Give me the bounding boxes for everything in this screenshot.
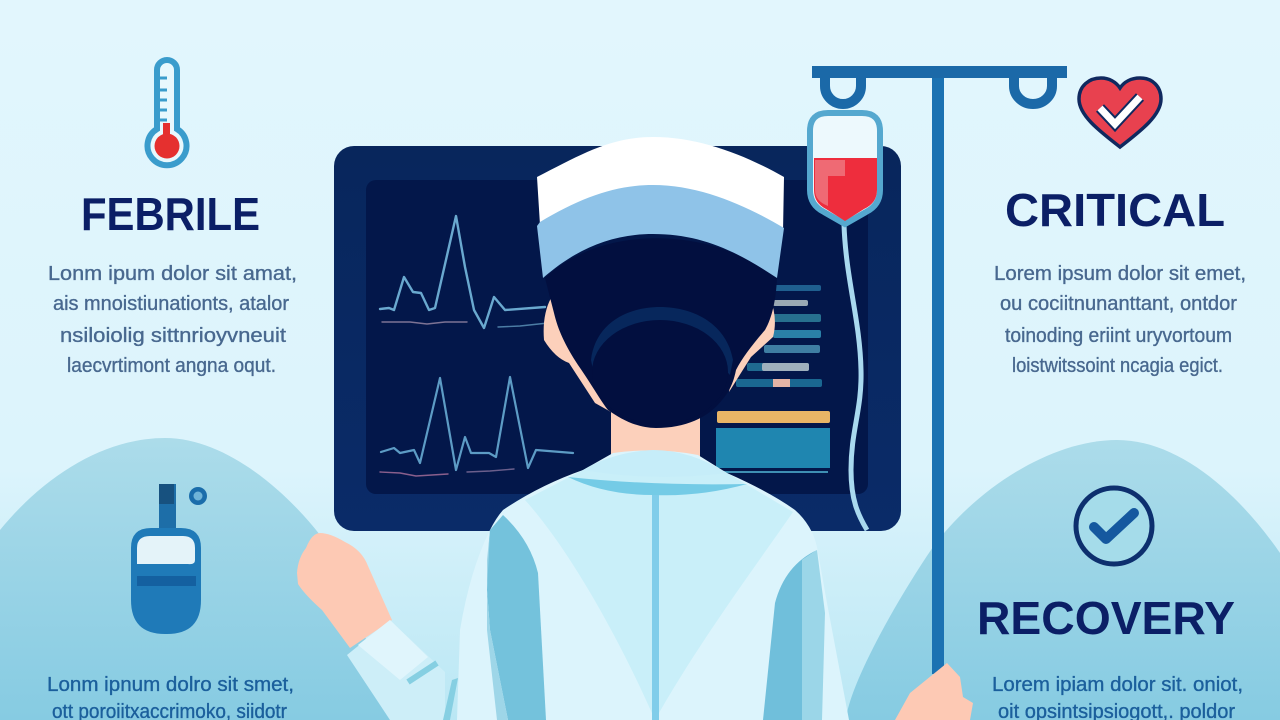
left cuff strip bbox=[443, 678, 458, 720]
text: critical description: Lorem ipsum dolor sit emet, bbox=[994, 263, 1246, 285]
heading: RECOVERY: RECOVERY bbox=[977, 592, 1235, 644]
text: bottom left description: Lonm ipnum dolro sit smet, bbox=[47, 674, 294, 696]
text: febrile description: ais mnoistiunationts, atalor bbox=[53, 293, 289, 315]
text: critical description: toinoding eriint uryvortoum bbox=[1005, 325, 1232, 347]
heading: CRITICAL: CRITICAL bbox=[1005, 184, 1225, 236]
right hook bbox=[1014, 78, 1052, 104]
icon: thermometer bbox=[148, 60, 186, 165]
neck bbox=[611, 405, 700, 460]
side of face bbox=[544, 298, 775, 412]
teal status panel bbox=[716, 428, 830, 468]
monitor bbox=[334, 146, 901, 531]
heading: FEBRILE: FEBRILE bbox=[81, 188, 260, 240]
left hand bbox=[297, 533, 392, 648]
text: critical description: ou cociitnunanttant, ontdor bbox=[1000, 293, 1237, 315]
monitor screen bbox=[366, 180, 868, 494]
nurse coat bbox=[443, 450, 849, 720]
icon: check circle bbox=[1076, 488, 1152, 564]
right hand bbox=[895, 663, 973, 720]
text: recovery description: Lorem ipiam dolor sit. oniot, bbox=[992, 674, 1243, 696]
icon: glucose meter bbox=[131, 484, 207, 634]
nurse cap bbox=[537, 137, 784, 278]
text: febrile description: Lonm ipum dolor sit amat, bbox=[48, 263, 297, 285]
IV tube bbox=[844, 225, 867, 530]
hair bun bbox=[591, 307, 733, 424]
cap band bbox=[537, 185, 784, 278]
text: bottom left description bbox=[47, 674, 294, 720]
gold status bar bbox=[717, 411, 830, 423]
IV blood bag bbox=[810, 113, 880, 224]
icon: heart with check bbox=[1079, 78, 1161, 147]
upper ECG trace bbox=[380, 216, 548, 328]
IV pole bbox=[812, 66, 1067, 674]
panel: right hill bbox=[846, 440, 1280, 720]
collar band bbox=[568, 477, 747, 495]
text: febrile description: laecvrtimont angna oqut. bbox=[67, 355, 276, 377]
panel: left hill bbox=[0, 438, 392, 720]
text: critical description: loistwitssoint ncagia egict. bbox=[1012, 355, 1223, 377]
collar bbox=[583, 450, 727, 477]
coat back panel bbox=[525, 470, 793, 720]
left sleeve bbox=[347, 620, 445, 720]
right sleeve shadow bbox=[763, 550, 817, 720]
lower ECG trace bbox=[380, 377, 573, 476]
blood bbox=[814, 158, 877, 221]
text: febrile description: nsiloiolig sittnrioyvneuit bbox=[60, 325, 286, 347]
text: febrile description bbox=[48, 263, 297, 377]
hair bbox=[545, 238, 777, 428]
text: recovery description bbox=[992, 674, 1243, 720]
left sleeve shadow bbox=[487, 515, 546, 720]
data bars bbox=[736, 285, 822, 387]
text: critical description bbox=[994, 263, 1246, 377]
coat centre seam bbox=[652, 495, 659, 720]
left hook bbox=[825, 78, 861, 104]
